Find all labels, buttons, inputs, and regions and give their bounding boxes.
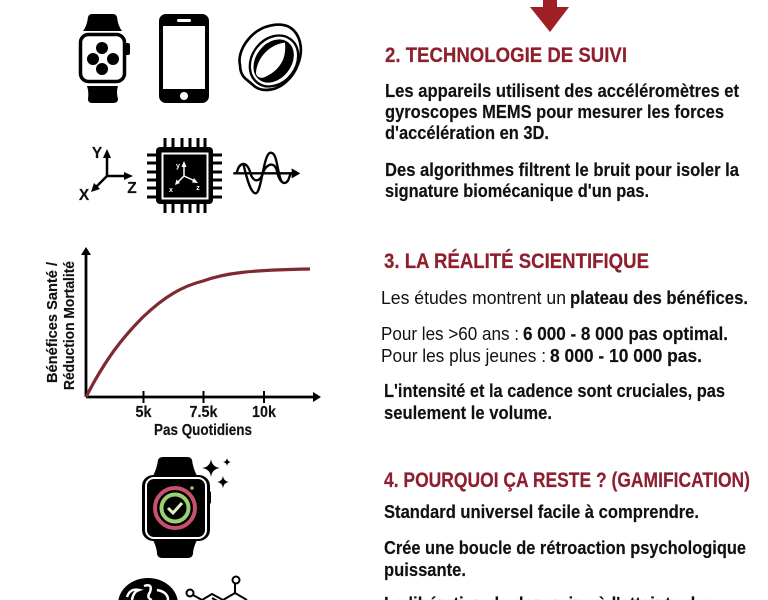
paragraph: algorithmes: signature biomécanique d'un pas. — [385, 181, 649, 201]
paragraph: capteurs: Les appareils utilisent des accéléromètres et — [385, 81, 739, 101]
paragraph: plateau: Les études montrent un — [381, 288, 566, 308]
icon: smartwatch — [80, 14, 130, 103]
y axis title — [44, 261, 78, 390]
paragraph: intensité: seulement le volume. — [384, 403, 552, 423]
y axis arrowhead — [81, 247, 91, 255]
section 2: technologie de suivi — [385, 44, 740, 201]
icon: sensor waveform — [233, 153, 300, 193]
icon: MEMS chip: x — [169, 187, 173, 194]
icon: 3D axes — [79, 145, 137, 204]
x tick labels — [136, 404, 276, 421]
paragraph: plateau — [381, 288, 748, 308]
icon: smartphone — [159, 14, 209, 103]
paragraph: algorithmes — [385, 160, 740, 201]
icon: 3D axes: Z — [127, 180, 137, 197]
paragraph: standard: Standard universel facile à comprendre. — [384, 502, 699, 522]
paragraph: capteurs — [385, 81, 739, 143]
x axis arrowhead — [313, 392, 321, 402]
chart axes — [86, 252, 316, 397]
section 3: la réalité scientifique — [381, 250, 748, 423]
paragraph: boucle: puissante. — [384, 560, 466, 580]
paragraph: recommandations par âge: Pour les plus jeunes : — [381, 346, 546, 366]
icon: sparkles — [202, 458, 231, 488]
section 4: gamification — [384, 469, 750, 600]
paragraph: capteurs: gyroscopes MEMS pour mesurer les forces — [385, 102, 724, 122]
x axis title: Pas Quotidiens — [154, 422, 252, 439]
x tick labels: 10k — [252, 404, 276, 421]
paragraph: intensité: L'intensité et la cadence sont cruciales, pas — [384, 381, 725, 401]
icon: MEMS chip: z — [196, 185, 200, 192]
arrow: down to section 2 — [530, 0, 569, 32]
paragraph: capteurs: d'accélération en 3D. — [385, 123, 549, 143]
icon: 3D axes: Y — [92, 145, 103, 162]
y axis title: Réduction Mortalité — [61, 261, 78, 390]
icon: smart ring — [239, 25, 308, 96]
icon: MEMS chip — [147, 138, 222, 213]
heading: 2. TECHNOLOGIE DE SUIVI — [385, 44, 627, 67]
icon: brain — [118, 578, 178, 600]
x tick labels: 7.5k — [190, 404, 218, 421]
chart: benefits plateau curve — [44, 247, 321, 439]
paragraph: boucle — [384, 538, 746, 580]
paragraph: recommandations par âge: Pour les >60 ans : — [381, 324, 519, 344]
paragraph: algorithmes: Des algorithmes filtrent le bruit pour isoler la — [385, 160, 740, 180]
icon: dopamine molecule — [186, 576, 247, 600]
icon: 3D axes: X — [79, 187, 90, 204]
paragraph: recommandations par âge: 8 000 - 10 000 pas. — [550, 346, 702, 366]
heading: 3. LA RÉALITÉ SCIENTIFIQUE — [384, 250, 649, 273]
paragraph: intensité — [384, 381, 725, 423]
paragraph: recommandations par âge — [381, 324, 728, 366]
y axis title: Bénéfices Santé / — [44, 261, 61, 383]
x tick labels: 5k — [136, 404, 152, 421]
icon: activity watch — [142, 457, 211, 558]
paragraph: recommandations par âge: 6 000 - 8 000 pas optimal. — [523, 324, 728, 344]
benefit curve — [86, 269, 310, 397]
paragraph: plateau: plateau des bénéfices. — [570, 288, 748, 308]
icon: MEMS chip: y — [176, 163, 180, 170]
x axis ticks — [144, 391, 264, 403]
